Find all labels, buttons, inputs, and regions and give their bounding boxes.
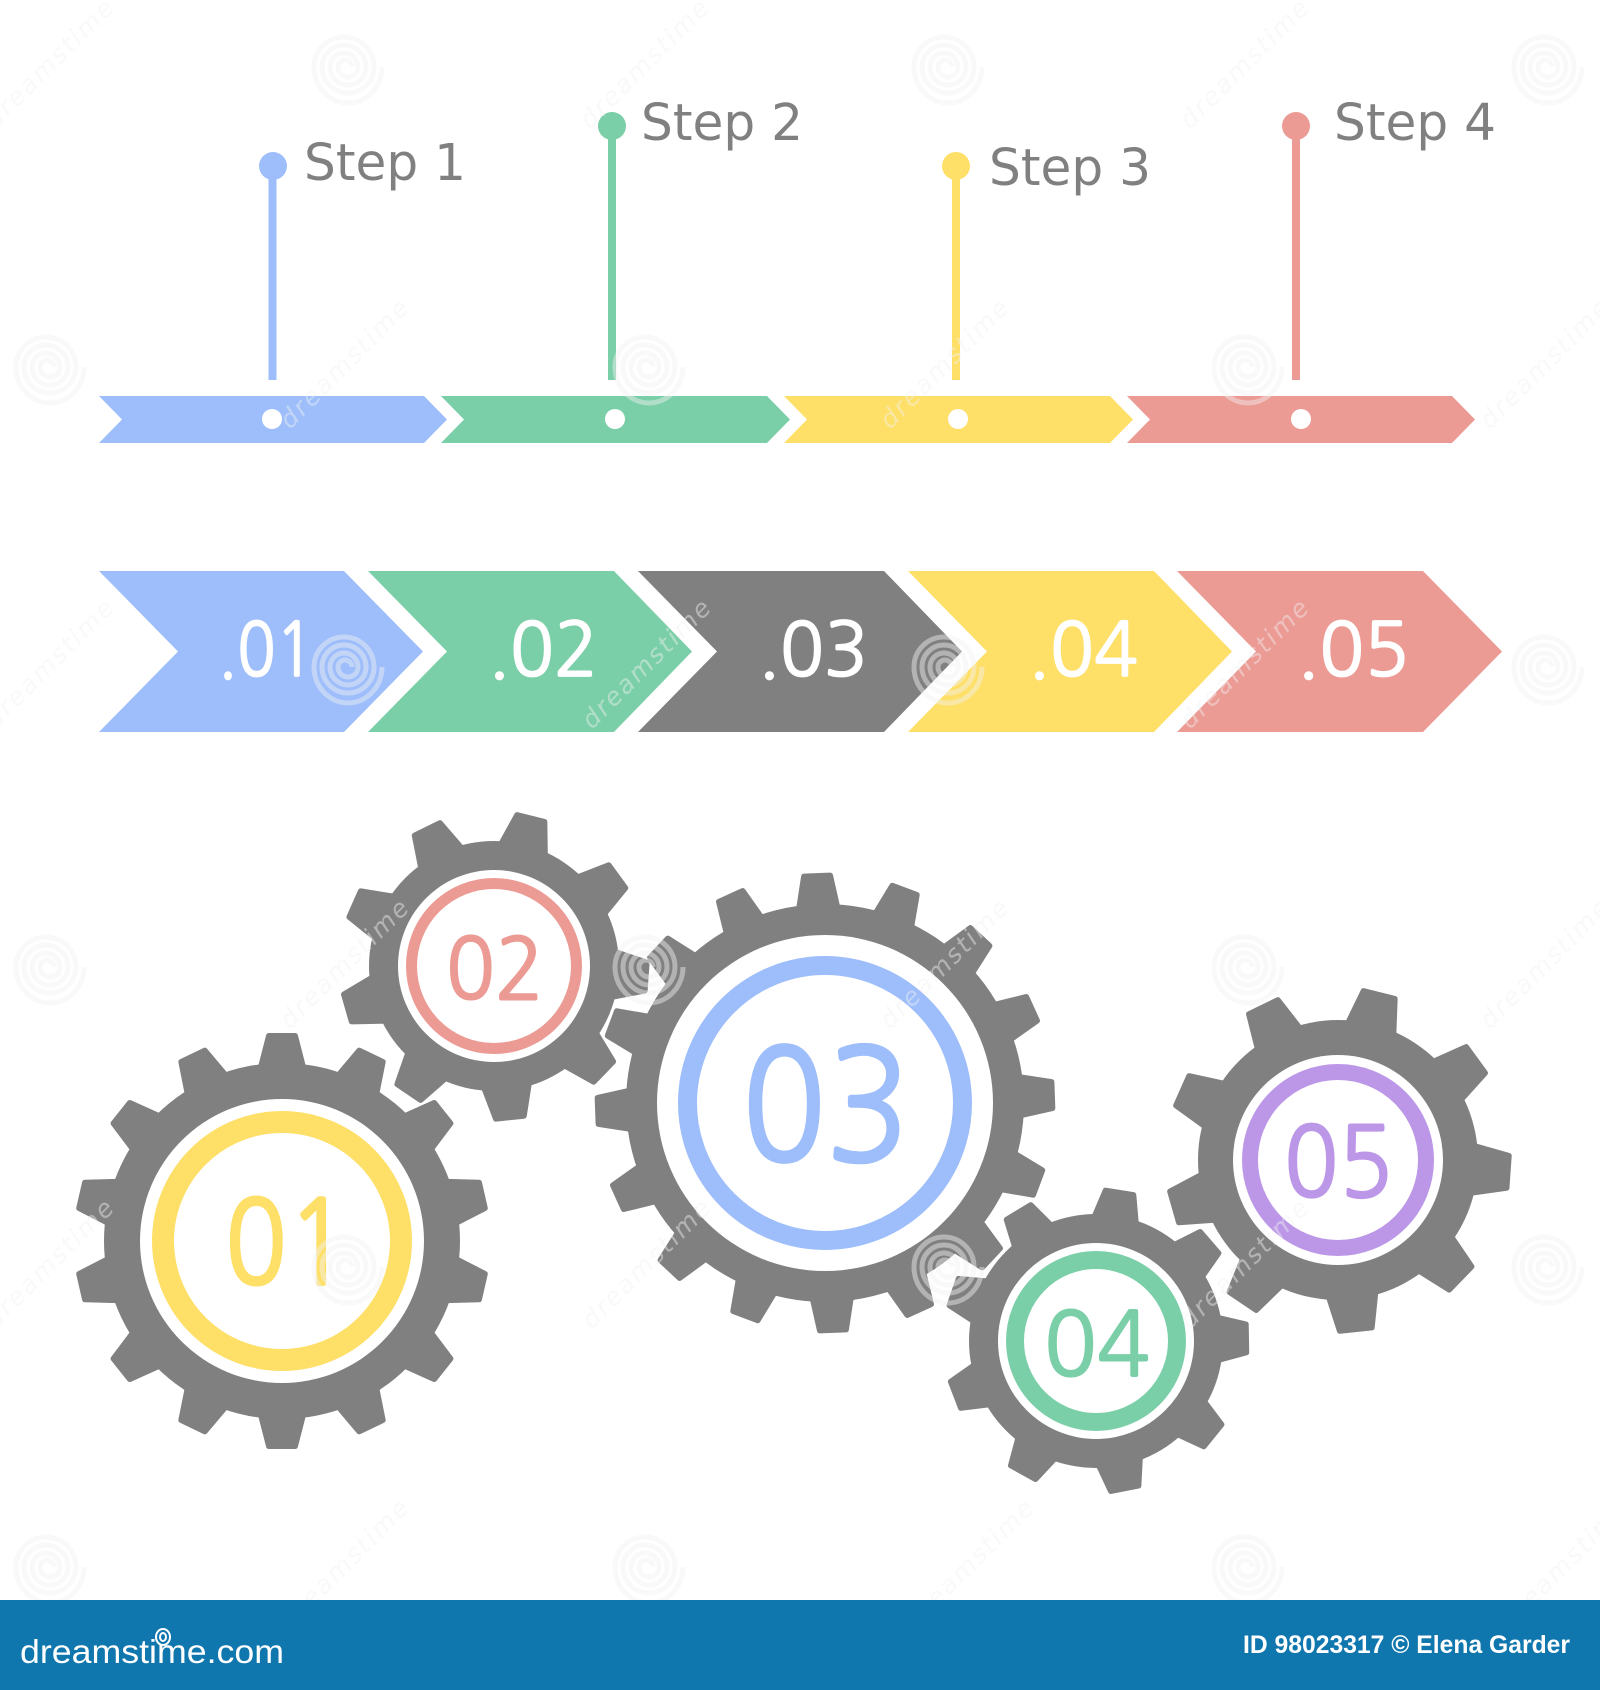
chevron .05 bbox=[1177, 571, 1502, 732]
chevron .02 bbox=[368, 571, 692, 732]
panel: numbered chevrons bbox=[99, 571, 1502, 732]
watermark overlay: dreamstime bbox=[274, 294, 414, 434]
gear 03 bbox=[597, 875, 1053, 1331]
step 1 pin and label bbox=[259, 134, 466, 380]
gear 02: 02 bbox=[446, 927, 544, 1012]
panel: step timeline bbox=[99, 94, 1496, 443]
footer logo text: dreamstime.com bbox=[20, 1633, 284, 1670]
timeline arrow 4 bbox=[1127, 396, 1475, 443]
watermark overlay: dreamstime bbox=[576, 1194, 716, 1334]
gear 05: 05 bbox=[1284, 1114, 1393, 1211]
chevron .03: .03 bbox=[758, 613, 868, 687]
watermark overlay: dreamstime bbox=[576, 594, 716, 734]
gear 02 bbox=[342, 813, 647, 1120]
timeline arrow 1 bbox=[99, 396, 447, 443]
watermark overlay: dreamstime bbox=[274, 894, 414, 1034]
chevron .01 bbox=[99, 571, 423, 732]
timeline arrow 3 bbox=[784, 396, 1133, 443]
gear 03: 03 bbox=[742, 1029, 910, 1184]
step 4 pin and label bbox=[1282, 94, 1496, 380]
watermark overlay: dreamstime bbox=[874, 894, 1014, 1034]
watermark overlay: dreamstime bbox=[899, 1494, 1039, 1634]
chevron .01: .01 bbox=[218, 613, 314, 687]
chevron .04: .04 bbox=[1028, 613, 1138, 687]
watermark overlay: dreamstime bbox=[1174, 594, 1314, 734]
chevron .05: .05 bbox=[1297, 613, 1409, 687]
gear 04 bbox=[947, 1189, 1246, 1492]
icon: logo spiral bbox=[156, 1629, 170, 1645]
gear 01: 01 bbox=[225, 1185, 349, 1301]
gear 05 bbox=[1168, 989, 1509, 1332]
watermark overlay: dreamstime bbox=[874, 294, 1014, 434]
footer credit: ID 98023317 © Elena Garder bbox=[1243, 1631, 1570, 1659]
watermark overlay: dreamstime bbox=[1174, 1194, 1314, 1334]
panel: gears bbox=[77, 813, 1509, 1492]
step 4 pin and label: Step 4 bbox=[1334, 94, 1496, 153]
chevron .04 bbox=[908, 571, 1232, 732]
chevron .02: .02 bbox=[488, 613, 598, 687]
step 3 pin and label: Step 3 bbox=[989, 139, 1151, 198]
step 1 pin and label: Step 1 bbox=[304, 134, 466, 193]
step 2 pin and label bbox=[598, 94, 803, 380]
footer bar bbox=[0, 1600, 1600, 1690]
gear 01 bbox=[77, 1036, 487, 1446]
gear 04: 04 bbox=[1044, 1301, 1150, 1389]
step 3 pin and label bbox=[942, 139, 1151, 380]
watermark overlay: dreamstime bbox=[274, 1494, 414, 1634]
chevron .03 bbox=[638, 571, 962, 732]
step 2 pin and label: Step 2 bbox=[641, 94, 803, 153]
timeline arrow 2 bbox=[441, 396, 790, 443]
